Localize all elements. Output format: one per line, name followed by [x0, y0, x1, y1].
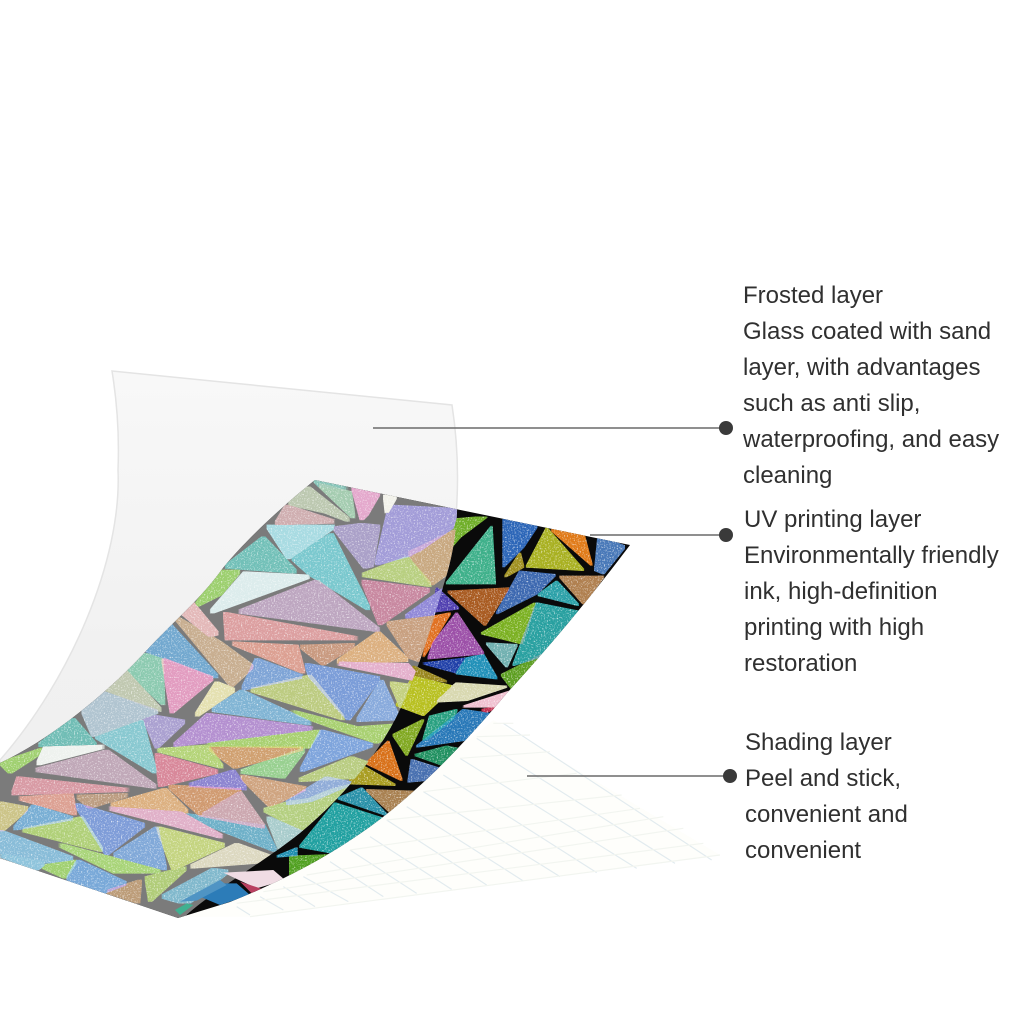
text: shading layer: Shading layer: [745, 729, 892, 756]
shading layer grid: [180, 720, 720, 917]
leader line: UV printing layer: [590, 528, 733, 542]
text: shading layer: Peel and stick,: [745, 765, 901, 792]
text: shading layer: convenient: [745, 837, 861, 864]
text: frosted layer: layer, with advantages: [743, 354, 980, 381]
text: shading layer: [745, 729, 908, 864]
text: frosted layer: cleaning: [743, 462, 832, 489]
text: UV printing layer: Environmentally friendly: [744, 542, 999, 569]
text: frosted layer: Frosted layer: [743, 282, 883, 309]
leader line: shading layer: [527, 769, 737, 783]
UV printed stained glass sheet: [0, 470, 640, 920]
text: frosted layer: Glass coated with sand: [743, 318, 991, 345]
text: frosted layer: [743, 282, 999, 489]
text: UV printing layer: [744, 506, 999, 677]
text: UV printing layer: UV printing layer: [744, 506, 921, 533]
text: frosted layer: waterproofing, and easy: [743, 426, 999, 453]
text: UV printing layer: ink, high-definition: [744, 578, 937, 605]
text: shading layer: convenient and: [745, 801, 908, 828]
leader line: frosted layer: [373, 421, 733, 435]
pastel tiles under the frosted layer: [0, 480, 457, 903]
bottom edge tiles near the sheet corner: [175, 870, 285, 915]
text: UV printing layer: restoration: [744, 650, 857, 677]
frosted layer sheet: [0, 371, 458, 913]
text: frosted layer: such as anti slip,: [743, 390, 920, 417]
vivid tiles outside the frosted layer: [277, 517, 625, 875]
text: UV printing layer: printing with high: [744, 614, 924, 641]
